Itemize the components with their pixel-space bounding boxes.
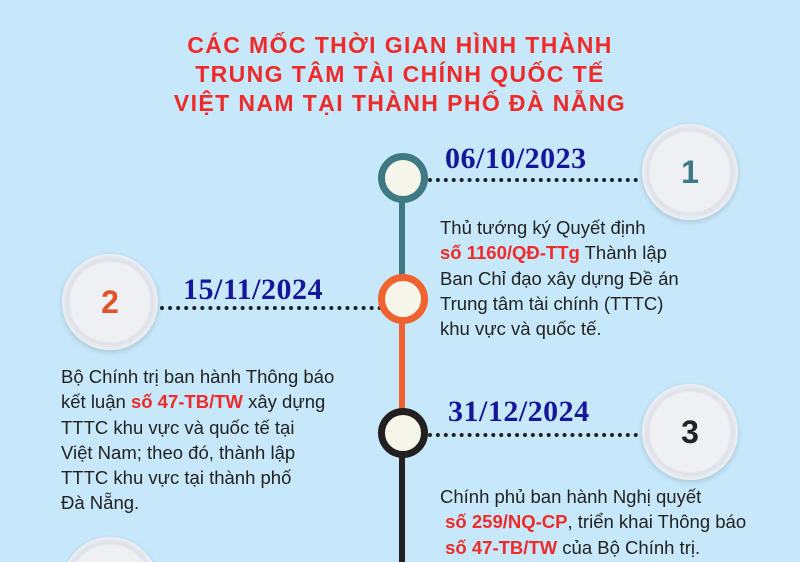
badge 2: 2 (101, 284, 119, 320)
text 2: Đà Nẵng. (61, 492, 139, 513)
text 2: TTTC khu vực và quốc tế tại (61, 417, 294, 438)
text 1: Thủ tướng ký Quyết định (440, 217, 646, 238)
date 2: 15/11/2024 (183, 273, 323, 306)
node 2 (378, 274, 428, 324)
badge 4 partial (67, 537, 153, 562)
text 1: khu vực và quốc tế. (440, 318, 602, 339)
title: CÁC MỐC THỜI GIAN HÌNH THÀNH (187, 32, 613, 58)
badge 1 (642, 124, 738, 220)
text 3: Chính phủ ban hành Nghị quyết (440, 486, 701, 507)
dotted connector 1 (428, 178, 638, 182)
title (174, 32, 626, 116)
text 3: số 47-TB/TW của Bộ Chính trị. (445, 537, 700, 558)
title: VIỆT NAM TẠI THÀNH PHỐ ĐÀ NẴNG (174, 90, 626, 116)
node 3 (378, 408, 428, 458)
text 2: kết luận số 47-TB/TW xây dựng (61, 391, 325, 412)
timeline line (399, 180, 405, 562)
badge 1: 1 (681, 154, 699, 190)
dotted connector 3 (428, 433, 638, 437)
text 2 (61, 366, 334, 513)
text 1: số 1160/QĐ-TTg Thành lập (440, 242, 667, 263)
text 2: Việt Nam; theo đó, thành lập (61, 442, 295, 463)
badge 2 (62, 254, 158, 350)
text 3: số 259/NQ-CP, triển khai Thông báo (445, 511, 746, 532)
text 1: Ban Chỉ đạo xây dựng Đề án (440, 268, 679, 289)
date 3: 31/12/2024 (448, 395, 590, 428)
date 1: 06/10/2023 (445, 142, 587, 175)
dotted connector 2 (160, 306, 382, 310)
title: TRUNG TÂM TÀI CHÍNH QUỐC TẾ (195, 61, 605, 87)
text 1: Trung tâm tài chính (TTTC) (440, 293, 663, 314)
text 2: TTTC khu vực tại thành phố (61, 467, 291, 488)
text 1 (440, 217, 679, 339)
text 3 (440, 486, 746, 558)
badge 3: 3 (681, 414, 699, 450)
text 2: Bộ Chính trị ban hành Thông báo (61, 366, 334, 387)
badge 3 (642, 384, 738, 480)
node 1 (378, 153, 428, 203)
